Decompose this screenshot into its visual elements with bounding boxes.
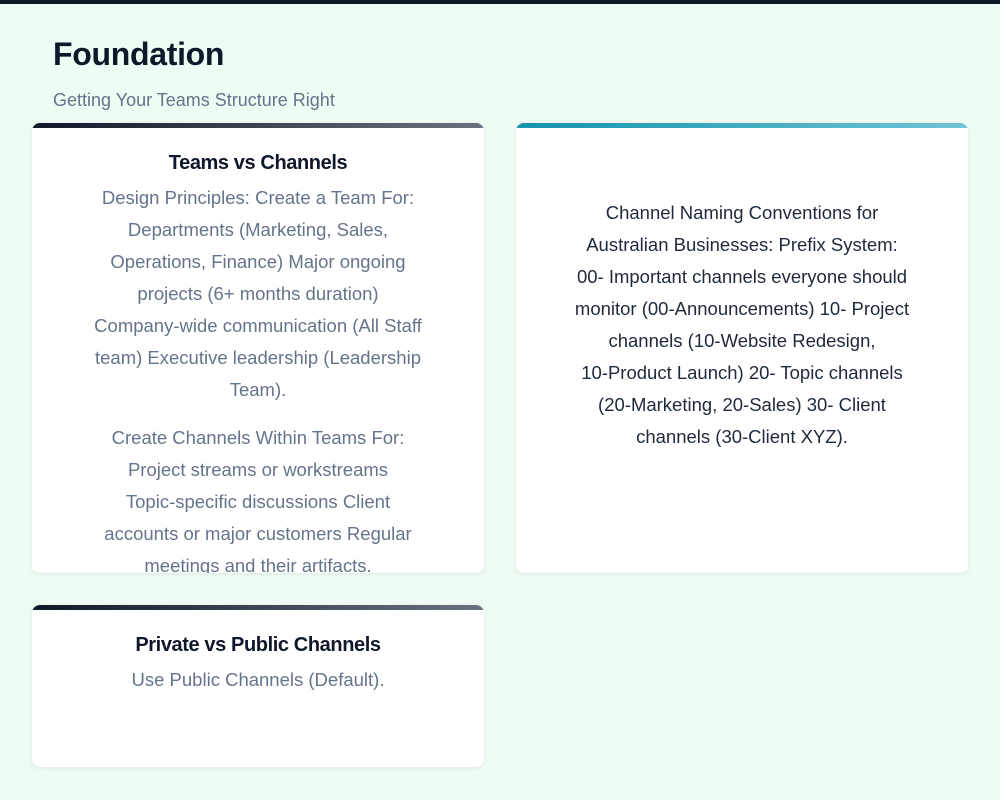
text: create a team for [94,187,422,400]
text: create channels within teams: accounts or major customers Regular [104,523,412,544]
panel: channel naming conventions [516,123,968,573]
text: create a team for: Design Principles: Create a Team For: [102,187,414,208]
text: create a team for: Departments (Marketing, Sales, [128,219,388,240]
text: naming conventions: Channel Naming Conventions for [606,202,878,223]
text: create a team for: projects (6+ months duration) [137,283,379,304]
text: use public channels: Use Public Channels (Default). [132,669,384,690]
text: create channels within teams: Topic-specific discussions Client [126,491,390,512]
text: naming conventions: channels (30-Client XYZ). [636,426,848,447]
text: create a team for: team) Executive leadership (Leadership [95,347,421,368]
text: naming conventions: Australian Businesses: Prefix System: [586,234,898,255]
text: create a team for: Company-wide communication (All Staff [94,315,422,336]
heading: teams vs channels: Teams vs Channels [169,152,347,174]
text: naming conventions: 10-Product Launch) 20- Topic channels [581,362,903,383]
text: create a team for: Operations, Finance) Major ongoing [110,251,406,272]
panel: private vs public channels [32,605,484,767]
heading: private vs public: Private vs Public Channels [135,634,381,656]
text: naming conventions: (20-Marketing, 20-Sales) 30- Client [598,394,886,415]
title: Foundation [53,36,224,72]
panel: teams vs channels [32,123,484,573]
text: create a team for: Team). [230,379,286,400]
subtitle: Getting Your Teams Structure Right [53,90,335,110]
text: naming conventions [575,202,909,447]
text: create channels within teams: Create Channels Within Teams For: [112,427,404,448]
text: create channels within teams: Project streams or workstreams [128,459,388,480]
text: naming conventions: 00- Important channels everyone should [577,266,907,287]
text: create channels within teams [104,427,412,573]
text: naming conventions: monitor (00-Announcements) 10- Project [575,298,909,319]
text: naming conventions: channels (10-Website Redesign, [608,330,876,351]
